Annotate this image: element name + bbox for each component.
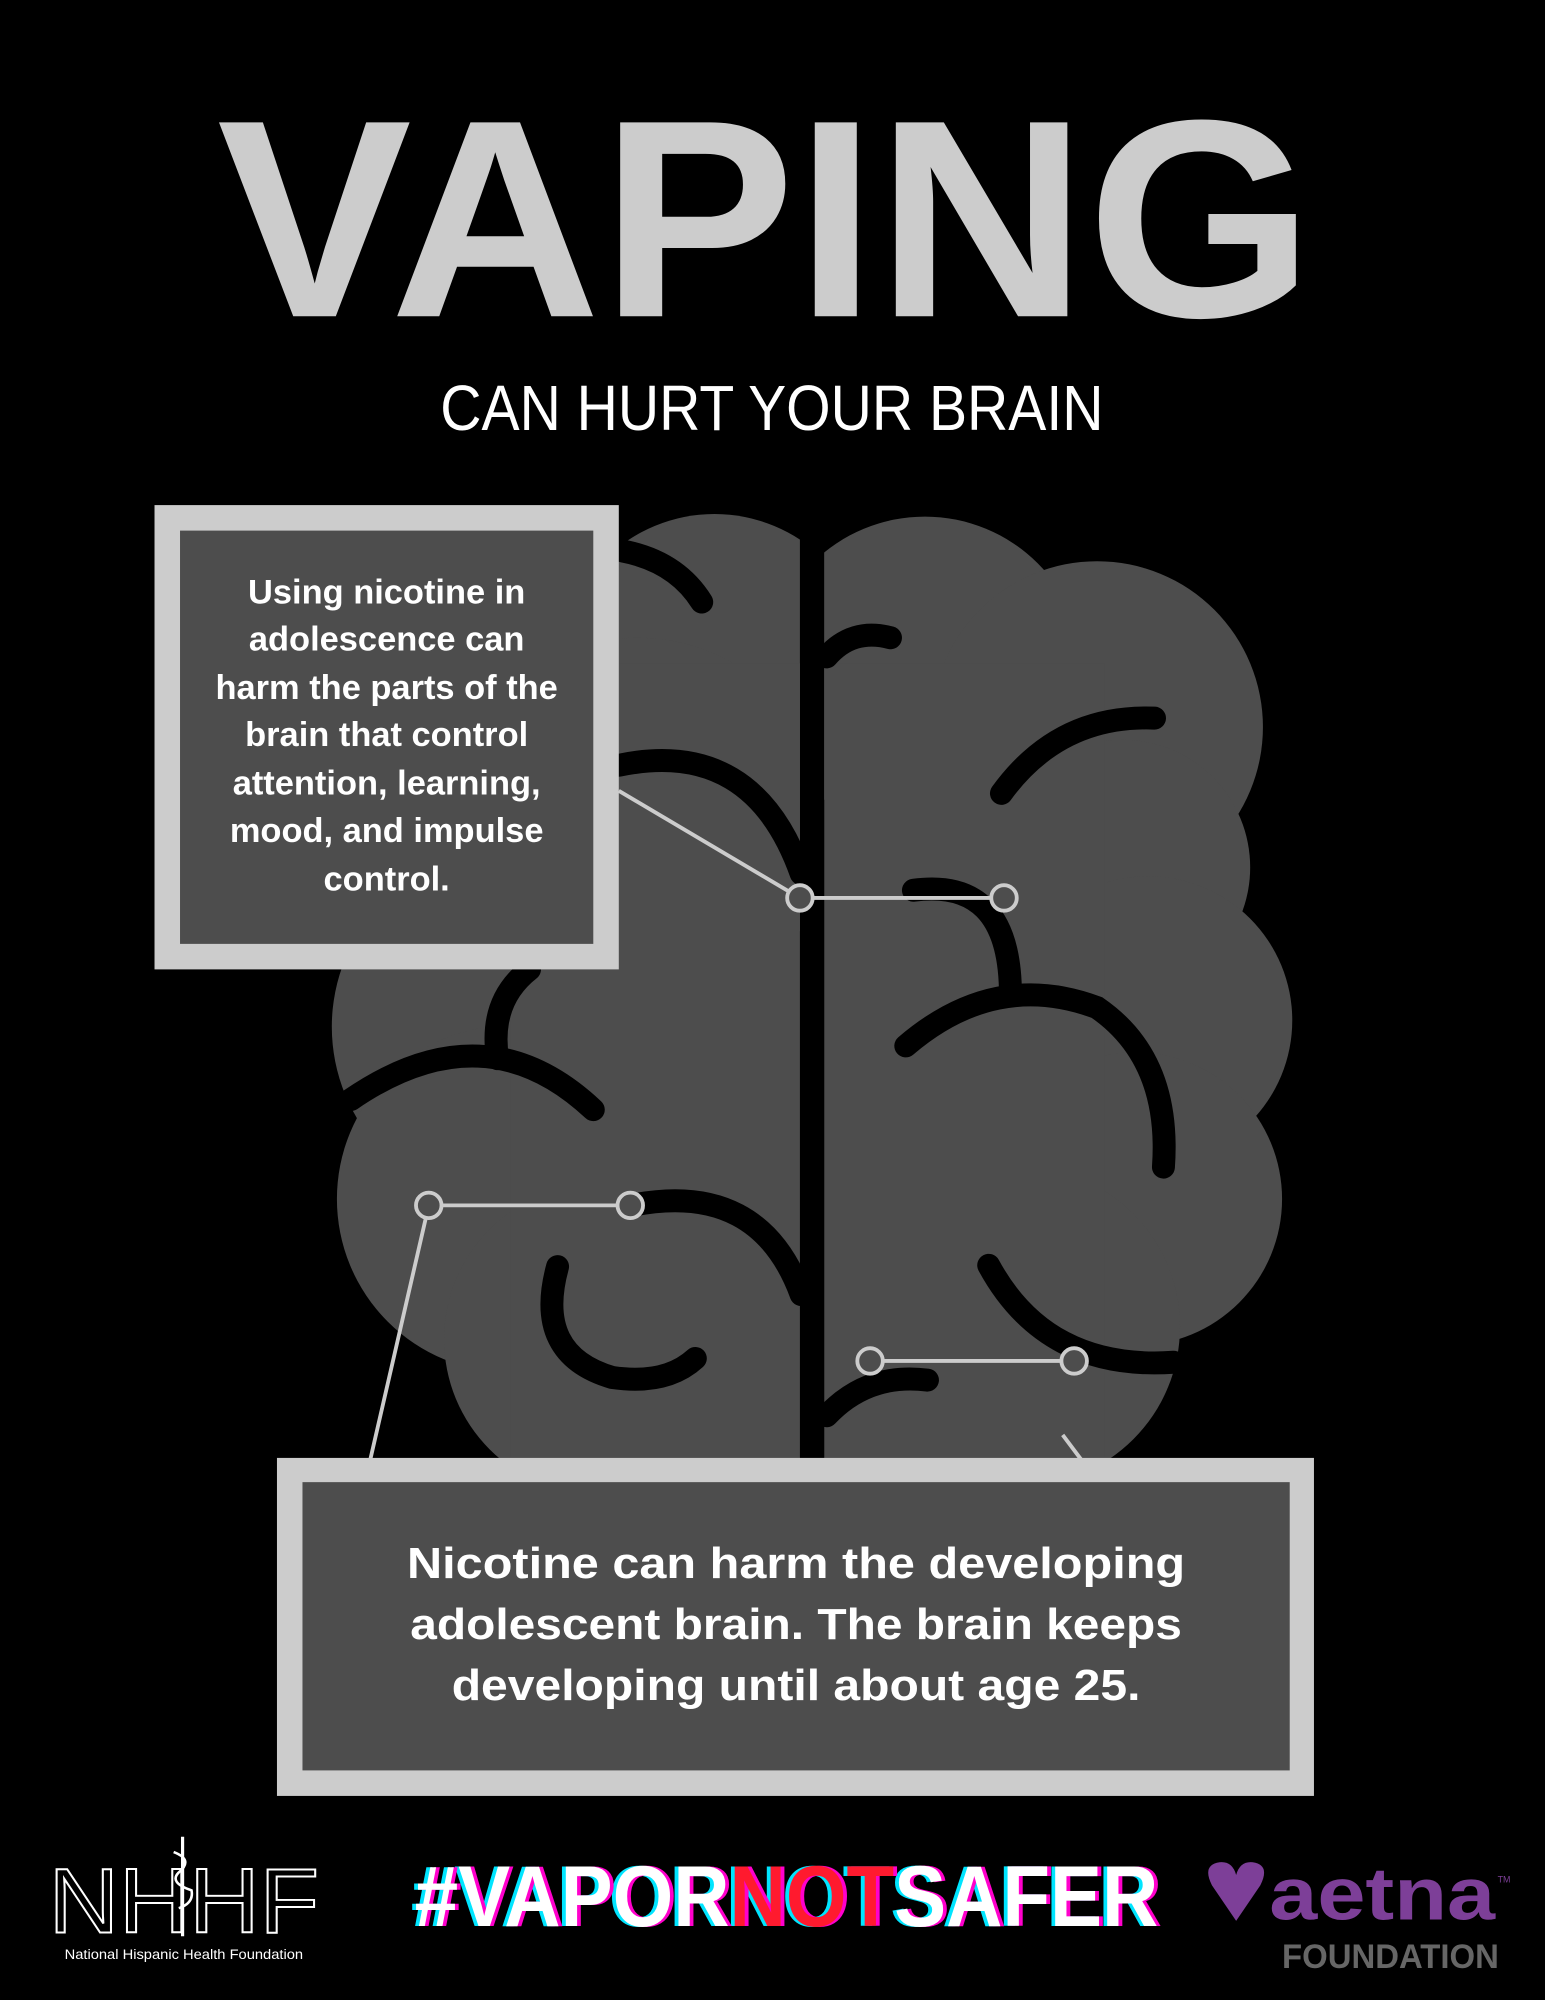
hashtag: #VAPORNOTSAFER: #VAPORNOTSAFER: [415, 1848, 1158, 1945]
callout: nicotine in adolescence: control.: [324, 860, 450, 898]
logo: aetna foundation: TM: [1498, 1875, 1510, 1885]
callout: nicotine in adolescence: Using nicotine in: [248, 573, 525, 611]
hashtag: #VAPORNOTSAFER: #VAPORNOTSAFER: [419, 1848, 1162, 1945]
title: VAPING: [217, 61, 1314, 376]
callout: nicotine in adolescence: attention, learning,: [233, 765, 541, 803]
logo: NHHF: National Hispanic Health Foundation: [65, 1946, 303, 1962]
callout: nicotine in adolescence: brain that control: [245, 716, 528, 754]
brain illustration: [332, 514, 1292, 1495]
connector lines: [370, 791, 1087, 1460]
callout: nicotine in adolescence: [155, 505, 619, 969]
callout: nicotine in adolescence: adolescence can: [249, 621, 524, 659]
callout: developing brain: [277, 1458, 1314, 1796]
logo: NHHF: NHHF: [49, 1850, 319, 1952]
logo: aetna foundation: FOUNDATION: [1282, 1938, 1499, 1976]
logo: aetna foundation: aetna: [1269, 1853, 1496, 1936]
callout: nicotine in adolescence: mood, and impulse: [230, 812, 543, 850]
logo: aetna foundation: [1208, 1853, 1510, 1976]
subtitle: CAN HURT YOUR BRAIN: [440, 372, 1103, 444]
callout: developing brain: Nicotine can harm the developing: [407, 1540, 1185, 1588]
callout: developing brain: developing until about age 25.: [452, 1662, 1140, 1710]
callout: developing brain: adolescent brain. The brain keeps: [410, 1601, 1182, 1649]
callout: nicotine in adolescence: harm the parts of the: [215, 669, 558, 707]
hashtag: #VAPORNOTSAFER: #VAPORNOTSAFER: [411, 1848, 1155, 1945]
